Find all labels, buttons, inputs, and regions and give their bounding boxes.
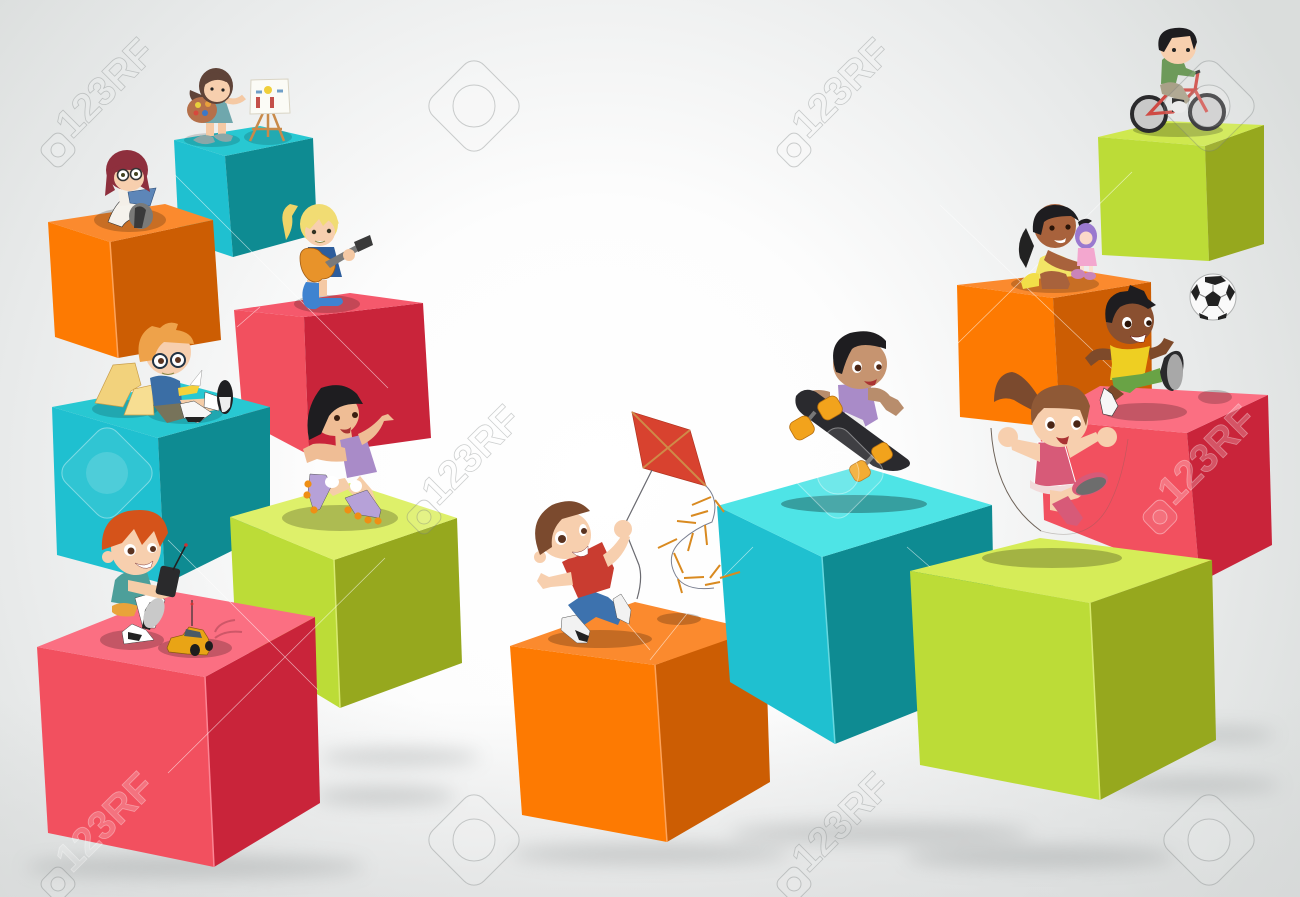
cube: middle green bbox=[230, 483, 462, 708]
character: girl skipping rope bbox=[991, 372, 1128, 534]
character: girl on roller skates bbox=[303, 385, 394, 525]
character: boy with kite bbox=[534, 501, 632, 643]
watermark: mid icon on teal cube bbox=[787, 422, 889, 524]
character: girl hugging doll bbox=[1019, 204, 1097, 289]
icon: doll bbox=[1071, 223, 1097, 280]
cube: upper red bbox=[234, 293, 431, 455]
watermark: top center icon bbox=[423, 55, 525, 157]
character: boy kicking bbox=[1085, 285, 1184, 416]
character: girl painting bbox=[187, 68, 290, 144]
watermark: top center right: 123RF bbox=[783, 30, 899, 146]
icon: kite bbox=[625, 412, 740, 599]
watermark: bottom left: 123RF bbox=[47, 764, 163, 880]
watermark: top right icon bbox=[1158, 55, 1260, 157]
floor shadows bbox=[25, 728, 1280, 878]
watermark: bottom center icon bbox=[423, 789, 525, 891]
watermark: right: 123RF bbox=[1149, 397, 1265, 513]
character: boy reading with cushion bbox=[95, 323, 233, 423]
watermark: mid left icon bbox=[56, 422, 158, 524]
cube: upper right green bbox=[1098, 121, 1264, 261]
cube: middle teal bbox=[52, 383, 270, 584]
cube: small teal bbox=[174, 126, 317, 257]
easel bbox=[250, 79, 290, 141]
watermark: mid center: 123RF bbox=[413, 397, 529, 513]
watermark: top left: 123RF bbox=[47, 30, 163, 146]
cube: center orange bbox=[510, 602, 770, 842]
cube: upper orange bbox=[48, 204, 221, 358]
icon: toy car bbox=[167, 600, 242, 656]
cube: large teal bbox=[717, 466, 995, 744]
character: boy on skateboard bbox=[787, 331, 910, 483]
cube: right red bbox=[1040, 386, 1272, 582]
thin diagonal watermark lines bbox=[168, 172, 1132, 773]
kite tail bbox=[658, 486, 740, 593]
cube: large red bbox=[37, 592, 320, 867]
character: boy with remote control bbox=[102, 510, 188, 644]
character: girl reading bbox=[105, 150, 156, 229]
cube: large green bbox=[910, 538, 1216, 800]
watermark: bottom right icon bbox=[1158, 789, 1260, 891]
cube: right orange bbox=[957, 271, 1152, 428]
icon: soccer ball bbox=[1190, 274, 1236, 320]
character: girl with guitar bbox=[282, 204, 373, 309]
character: boy riding bicycle bbox=[1132, 28, 1224, 131]
watermark: bottom center right: 123RF bbox=[783, 764, 899, 880]
